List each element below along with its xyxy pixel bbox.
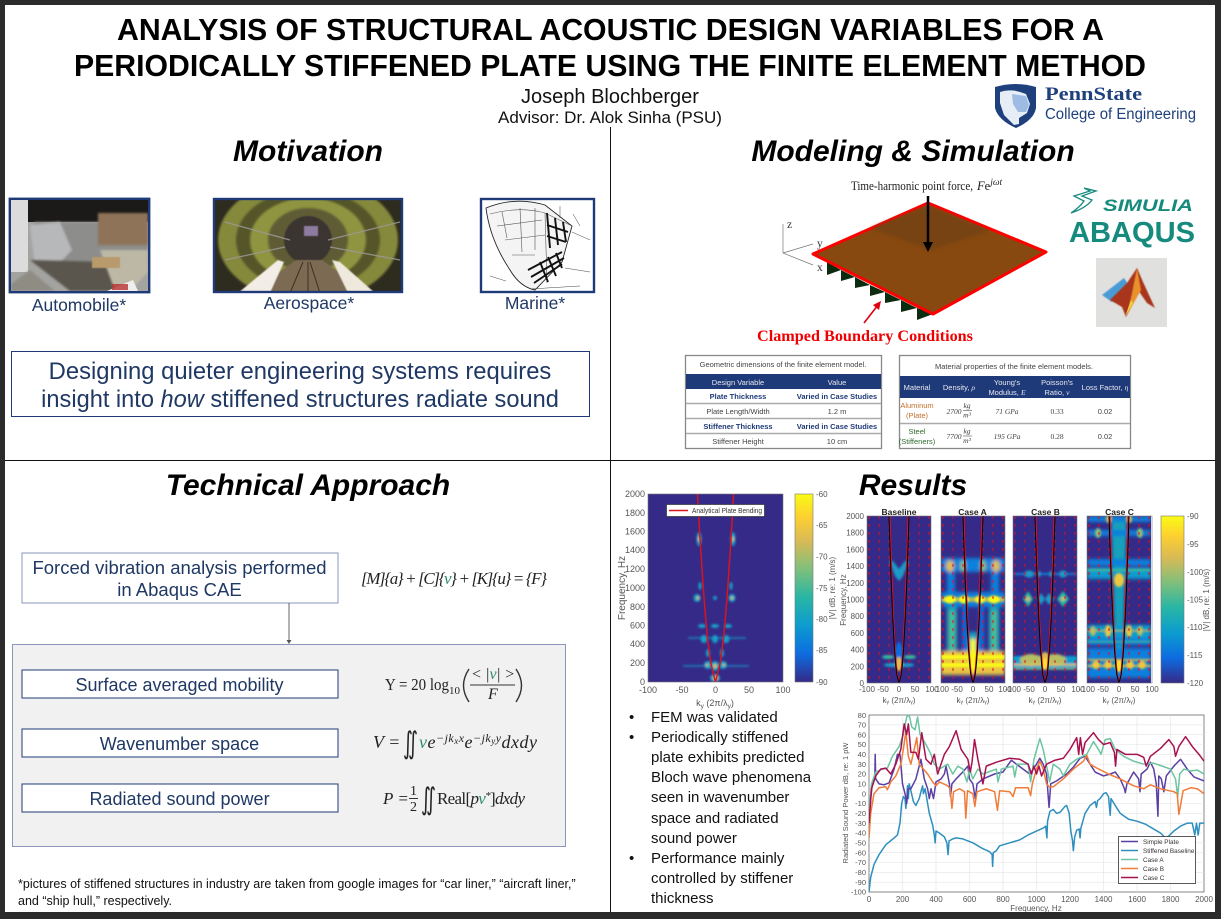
chart legend: sound power series (1118, 836, 1196, 884)
table: material properties: (Stiffeners) (899, 437, 936, 446)
box: wavenumber space (22, 729, 338, 757)
chart: radiated sound power line chart: -80 (855, 868, 866, 877)
callout: motivation statement: Designing quieter engineering systems requires (49, 358, 551, 385)
series: simple plate (869, 754, 1204, 823)
equation: mobility: 10 (449, 685, 460, 697)
table: material properties: kg (963, 401, 971, 410)
figure: stiffened plate finite element model: y (817, 238, 823, 250)
logo: Matlab (1096, 258, 1167, 327)
chart: validation wavenumber map: -85 (816, 646, 828, 655)
bullet list: conclusions: space and radiated (651, 810, 779, 827)
chart legend: analytical plate bending (666, 504, 764, 516)
heading: results: Results (859, 469, 967, 502)
chart: case study wavenumber maps: 800 (851, 612, 865, 621)
chart: validation wavenumber map: -70 (816, 552, 828, 562)
table: material properties: 2700 (946, 407, 962, 416)
chart: case study wavenumber maps: 1200 (846, 579, 865, 588)
figure: stiffened plate finite element model (757, 178, 1046, 345)
heading: technical approach: Technical Approach (166, 469, 450, 502)
chart: radiated sound power line chart: 50 (858, 740, 866, 749)
equation: mobility: < |v| > (471, 666, 515, 683)
series: case A (869, 715, 1204, 813)
chart: case study wavenumber maps: kᵧ (2π/λᵧ) (957, 696, 990, 705)
table: material properties: 0.33 (1050, 407, 1064, 416)
equation: radiated power: dxdy (495, 789, 525, 808)
footnote (18, 877, 576, 908)
chart: validation wavenumber map: 2000 (625, 489, 645, 499)
heading: motivation: Motivation (233, 135, 383, 168)
chart: validation wavenumber map: 1400 (625, 545, 645, 555)
chart: case study wavenumber maps: 0 (860, 679, 865, 688)
panel: post-processing quantities (12, 644, 566, 846)
label: aerospace: Aerospace* (264, 293, 354, 313)
equation: radiated power: 1 (410, 784, 417, 799)
equation: wavenumber transform: ∬ (403, 726, 418, 761)
chart: case study wavenumber maps: -90 (1187, 512, 1199, 521)
chart: radiated sound power line chart (841, 711, 1213, 913)
chart: validation wavenumber map: 400 (630, 639, 645, 649)
figure: stiffened plate finite element model: x (817, 262, 823, 274)
panel: technical approach (12, 469, 576, 908)
series: stiffened baseline (869, 784, 1204, 892)
chart: case study wavenumber maps: 50 (911, 685, 920, 694)
chart: validation wavenumber map: -75 (816, 584, 828, 593)
chart: validation wavenumber map: 0 (640, 677, 645, 687)
series: case B (869, 732, 1204, 838)
equation: radiated power: Real[pv (437, 789, 486, 808)
chart: case study wavenumber maps: kᵧ (2π/λᵧ) (883, 696, 916, 705)
chart: radiated sound power line chart: 30 (858, 760, 866, 769)
chart: case study wavenumber maps: 400 (851, 646, 865, 655)
table: material properties: m³ (963, 436, 972, 445)
table: material properties: kg (963, 426, 971, 436)
chart: case study wavenumber maps: 0 (1117, 685, 1122, 694)
chart: radiated sound power line chart: -60 (855, 848, 866, 857)
step: forced vibration analysis: in Abaqus CAE (117, 579, 242, 600)
map: case C: Case C (1105, 507, 1134, 517)
chart: case study wavenumber maps: 1800 (846, 529, 865, 538)
map: case A: Case A (958, 507, 987, 517)
chart: validation wavenumber map: 1600 (625, 526, 645, 536)
equation: radiated power: P = (382, 789, 409, 808)
chart: validation wavenumber map: Frequency, Hz (617, 556, 628, 620)
chart: radiated sound power line chart: 80 (858, 711, 866, 720)
chart: case study wavenumber maps: 600 (851, 629, 865, 638)
chart: validation wavenumber map: k (696, 698, 701, 708)
bullet list: conclusions: • (629, 709, 634, 726)
chart: validation wavenumber map: |V| dB, re: 1 (m/s) (828, 556, 837, 619)
table: geometric dimensions: Varied in Case Studies (797, 422, 877, 431)
chart: radiated sound power line chart: Radiated Sound Power dB, re: 1 pW (841, 742, 850, 863)
photo: aerospace (212, 198, 404, 294)
table: material properties: Steel (908, 427, 926, 436)
chart: validation wavenumber map: y (728, 703, 732, 710)
map: case B (1013, 507, 1077, 683)
table: material properties (899, 356, 1130, 448)
chart: validation wavenumber map: 100 (775, 685, 791, 695)
table: material properties: Density, ρ (943, 383, 976, 392)
table: material properties: (Plate) (906, 411, 929, 420)
panel: motivation (9, 135, 595, 416)
step: forced vibration analysis: Forced vibration analysis performed (32, 557, 327, 578)
title (74, 12, 1146, 83)
logo: Simulia Abaqus: ABAQUS (1069, 217, 1195, 249)
chart: radiated sound power line chart: -20 (855, 809, 866, 818)
chart: validation wavenumber map: 600 (630, 620, 645, 630)
chart: case study wavenumber maps: kᵧ (2π/λᵧ) (1029, 696, 1062, 705)
figure: stiffened plate finite element model: z (787, 219, 792, 231)
logo: Penn State College of Engineering (995, 84, 1196, 128)
chart: case study wavenumber maps: 0 (971, 685, 976, 694)
chart: case study wavenumber maps: 50 (985, 685, 994, 694)
chart: validation wavenumber map: 50 (744, 685, 754, 695)
chart: validation wavenumber map: -80 (816, 615, 828, 624)
chart: radiated sound power line chart: 1400 (1095, 895, 1113, 904)
chart: radiated sound power line chart: -70 (855, 858, 866, 867)
table: material properties: Poisson's (1041, 378, 1073, 387)
bullet list: conclusions: Periodically stiffened (651, 729, 788, 746)
chart: radiated sound power line chart: 20 (858, 770, 866, 779)
logo: Simulia Abaqus: SIMULIA (1103, 197, 1193, 215)
callout: motivation statement (12, 352, 590, 416)
table: geometric dimensions: Geometric dimensions of the finite element model. (700, 360, 866, 369)
table: material properties: 0.02 (1098, 407, 1112, 416)
photo: marine (480, 198, 595, 293)
table: material properties: Ratio, ν (1044, 388, 1070, 397)
chart: radiated sound power line chart: 1600 (1128, 895, 1146, 904)
chart: case study wavenumber maps: 0 (1043, 685, 1048, 694)
chart: validation wavenumber map: 1800 (625, 508, 645, 518)
equation: equation of motion: [M]{a} + [C]{v} + [K]{u} = {F} (361, 569, 547, 588)
chart: radiated sound power line chart: 40 (858, 750, 866, 759)
chart: case study wavenumber maps: 100 (1071, 685, 1085, 694)
box: radiated sound power: Radiated sound power (89, 789, 270, 809)
chart: radiated sound power line chart: 600 (963, 895, 977, 904)
arrow: analysis to post-processing (286, 603, 292, 644)
bullet list: conclusions (629, 709, 812, 907)
chart: validation wavenumber map: -90 (816, 678, 828, 687)
equation: wavenumber transform: y (490, 736, 495, 746)
map: case B: Case B (1031, 507, 1060, 517)
footnote: *pictures of stiffened structures in industry are taken from google images for “car liner,” “aircraft liner,” (18, 877, 576, 891)
table: material properties: m³ (963, 410, 972, 420)
logo: Penn State College of Engineering: PennState (1045, 84, 1142, 105)
logo: Simulia Abaqus (1069, 188, 1195, 249)
bullet list: conclusions: controlled by stiffener (651, 870, 793, 887)
equation: mobility: F (487, 686, 498, 703)
table: geometric dimensions: Plate Thickness (710, 392, 766, 401)
equation: mobility (385, 666, 522, 703)
table: material properties: Material (904, 383, 931, 392)
bullet list: conclusions: • (629, 729, 634, 746)
equation: wavenumber transform: x (453, 736, 458, 746)
chart: case study wavenumber maps: 100 (1145, 685, 1159, 694)
table: geometric dimensions: Varied in Case Studies (797, 392, 877, 401)
title: ANALYSIS OF STRUCTURAL ACOUSTIC DESIGN VARIABLES FOR A (117, 12, 1104, 47)
chart: validation wavenumber map: 1000 (625, 583, 645, 593)
chart legend: sound power series: Simple Plate (1143, 839, 1179, 846)
chart: case study wavenumber maps: -50 (951, 685, 963, 694)
table: material properties: 0.02 (1098, 432, 1112, 441)
chart: radiated sound power line chart: 1000 (1028, 895, 1046, 904)
table: geometric dimensions: Stiffener Thickness (703, 422, 773, 431)
table: geometric dimensions: Value (828, 378, 846, 387)
title: PERIODICALLY STIFFENED PLATE USING THE FINITE ELEMENT METHOD (74, 48, 1146, 83)
equation: mobility: Υ = 20 log (385, 675, 449, 694)
panel: modeling and simulation (686, 135, 1195, 448)
equation: radiated power: ∬ (421, 782, 436, 817)
chart: case study wavenumber maps: 200 (851, 662, 865, 671)
chart: radiated sound power line chart: 60 (858, 730, 866, 739)
chart: case study wavenumber maps: -110 (1187, 623, 1203, 632)
chart: radiated sound power line chart: 0 (862, 789, 866, 798)
photo: automobile (9, 198, 150, 293)
chart: radiated sound power line chart: 70 (858, 720, 866, 730)
chart: radiated sound power line chart: -90 (855, 878, 866, 887)
chart: case study wavenumber maps: 50 (1057, 685, 1066, 694)
chart: case study wavenumber maps: Frequency, Hz (839, 574, 848, 626)
equation: wavenumber transform: y (495, 731, 502, 745)
chart: radiated sound power line chart: -100 (851, 888, 866, 897)
label: automobile: Automobile* (32, 295, 126, 315)
chart: validation wavenumber map (617, 489, 837, 710)
table: geometric dimensions: 10 cm (827, 437, 847, 446)
map: case A (941, 507, 1005, 683)
chart: radiated sound power line chart: 0 (867, 895, 872, 904)
chart: case study wavenumber maps: -115 (1187, 651, 1203, 660)
chart legend: sound power series: Case A (1143, 857, 1164, 864)
chart: case study wavenumber maps: -100 (1079, 685, 1096, 694)
chart: radiated sound power line chart: 1200 (1061, 895, 1079, 904)
chart: validation wavenumber map: -50 (675, 685, 689, 695)
chart: radiated sound power line chart: 10 (858, 780, 866, 788)
box: surface averaged mobility: Surface averaged mobility (75, 675, 284, 695)
chart: radiated sound power line chart: 800 (996, 895, 1010, 904)
chart: radiated sound power line chart: 200 (896, 895, 910, 904)
chart: case study wavenumber maps: -100 (859, 685, 876, 694)
table: geometric dimensions: Design Variable (712, 378, 764, 387)
chart: case study wavenumber maps: 100 (925, 685, 939, 694)
chart: case study wavenumber maps: -50 (877, 685, 889, 694)
table: material properties: 0.28 (1050, 432, 1064, 441)
advisor: Advisor: Dr. Alok Sinha (PSU) (498, 108, 722, 127)
chart: case study wavenumber maps: kᵧ (2π/λᵧ) (1103, 696, 1136, 705)
table: material properties: 7700 (946, 432, 962, 441)
chart legend: analytical plate bending: Analytical Plate Bending (692, 506, 762, 515)
bullet list: conclusions: • (629, 850, 634, 867)
chart: case study wavenumber maps: -100 (1005, 685, 1022, 694)
chart: case study wavenumber maps: 100 (998, 685, 1012, 694)
chart: case study wavenumber maps: 1400 (846, 562, 865, 571)
equation: wavenumber transform (373, 726, 537, 761)
table: material properties: Aluminum (900, 401, 934, 410)
chart: case study wavenumber maps: 50 (1131, 685, 1140, 694)
chart legend: sound power series: Case B (1143, 866, 1164, 873)
chart: radiated sound power line chart: Frequency, Hz (1010, 904, 1062, 913)
series: case C (869, 724, 1204, 823)
chart: case study wavenumber maps: -105 (1187, 596, 1204, 604)
map: baseline (867, 507, 931, 683)
table: geometric dimensions: Stiffener Height (712, 437, 765, 446)
equation: wavenumber transform: x (458, 731, 465, 745)
equation: wavenumber transform: −jk (436, 731, 454, 745)
chart: validation wavenumber map: 0 (713, 685, 718, 695)
chart: case study wavenumber maps: 1000 (846, 596, 865, 604)
table: material properties: Loss Factor, η (1082, 383, 1129, 392)
bullet list: conclusions: plate exhibits predicted (651, 749, 804, 766)
box: radiated sound power (22, 784, 338, 812)
panel: results (617, 469, 1213, 913)
bullet list: conclusions: FEM was validated (651, 709, 778, 726)
chart: validation wavenumber map: -65 (816, 521, 828, 530)
bullet list: conclusions: thickness (651, 890, 714, 907)
chart: case study wavenumber maps: 1600 (846, 545, 865, 554)
bullet list: conclusions: seen in wavenumber (651, 789, 789, 806)
chart: case study wavenumber maps: -100 (933, 685, 950, 694)
chart: case study wavenumber maps: -120 (1187, 679, 1204, 688)
bullet list: conclusions: Performance mainly (651, 850, 785, 867)
table: material properties: 195 GPa (994, 432, 1021, 441)
chart: validation wavenumber map: (2π/λ (704, 698, 728, 708)
table: material properties: Material properties of the finite element models. (935, 362, 1093, 371)
chart: case study wavenumber maps: -100 (1187, 568, 1204, 577)
chart: radiated sound power line chart: 400 (929, 895, 943, 904)
chart: radiated sound power line chart: 2000 (1195, 895, 1213, 904)
author: Joseph Blochberger (521, 86, 699, 108)
chart: radiated sound power line chart: -40 (855, 829, 866, 838)
logo: Penn State College of Engineering: College of Engineering (1045, 106, 1196, 123)
bullet list: conclusions: sound power (651, 830, 737, 847)
chart: validation wavenumber map: y (701, 703, 705, 710)
equation: radiated power: 2 (410, 800, 417, 815)
chart: validation wavenumber map: -100 (639, 685, 657, 695)
equation: wavenumber transform: ve (419, 732, 435, 752)
chart legend: sound power series: Stiffened Baseline (1143, 848, 1195, 855)
chart: validation wavenumber map: 200 (630, 658, 645, 668)
chart: radiated sound power line chart: 1800 (1162, 895, 1180, 904)
box: surface averaged mobility (22, 670, 338, 698)
chart: case study wavenumber maps (839, 507, 1211, 705)
chart: validation wavenumber map: ) (731, 698, 734, 708)
figure: stiffened plate finite element model: Fe (977, 179, 990, 193)
chart: validation wavenumber map: 1200 (625, 564, 645, 574)
equation: wavenumber transform: −jk (473, 731, 491, 745)
figure: stiffened plate finite element model: Clamped Boundary Conditions (757, 328, 973, 345)
label: marine: Marine* (505, 293, 565, 313)
table: material properties: Modulus, E (988, 388, 1026, 397)
equation: wavenumber transform: e (465, 732, 473, 752)
chart: validation wavenumber map: -60 (816, 490, 828, 499)
equation: radiated power: ] (490, 789, 496, 808)
callout: motivation statement: insight into how stiffened structures radiate sound (41, 387, 559, 413)
chart: radiated sound power line chart: -10 (855, 799, 866, 808)
chart: case study wavenumber maps: 0 (897, 685, 902, 694)
chart: validation wavenumber map: 800 (630, 602, 645, 612)
chart legend: sound power series: Case C (1143, 875, 1165, 882)
chart: case study wavenumber maps: -95 (1187, 540, 1199, 549)
footnote: and “ship hull,” respectively. (18, 894, 172, 908)
table: material properties: Young's (994, 378, 1020, 387)
chart: radiated sound power line chart: -30 (855, 819, 866, 828)
heading: modeling and simulation: Modeling & Simulation (751, 135, 1075, 168)
map: case C (1087, 507, 1152, 683)
table: geometric dimensions: 1.2 m (828, 407, 846, 416)
equation: wavenumber transform: dxdy (502, 732, 537, 752)
table: material properties: 71 GPa (995, 407, 1019, 416)
step: forced vibration analysis (22, 553, 338, 603)
equation: wavenumber transform: V = (373, 732, 400, 752)
table: geometric dimensions: Plate Length/Width (706, 407, 770, 416)
equation: radiated power (382, 782, 525, 817)
chart: radiated sound power line chart: -50 (855, 838, 866, 848)
map: baseline: Baseline (882, 507, 917, 517)
chart: case study wavenumber maps: -50 (1023, 685, 1035, 694)
equation: radiated power: * (485, 790, 491, 802)
chart: case study wavenumber maps: 2000 (846, 512, 865, 521)
chart: case study wavenumber maps: |V| dB, re: 1 (m/s) (1202, 568, 1211, 631)
box: wavenumber space: Wavenumber space (100, 734, 259, 754)
table: geometric dimensions (686, 356, 882, 448)
bullet list: conclusions: Bloch wave phenomena (651, 769, 812, 786)
chart: case study wavenumber maps: -50 (1097, 685, 1109, 694)
figure: stiffened plate finite element model: jωt (988, 178, 1003, 188)
figure: stiffened plate finite element model: Time-harmonic point force, (851, 178, 973, 193)
